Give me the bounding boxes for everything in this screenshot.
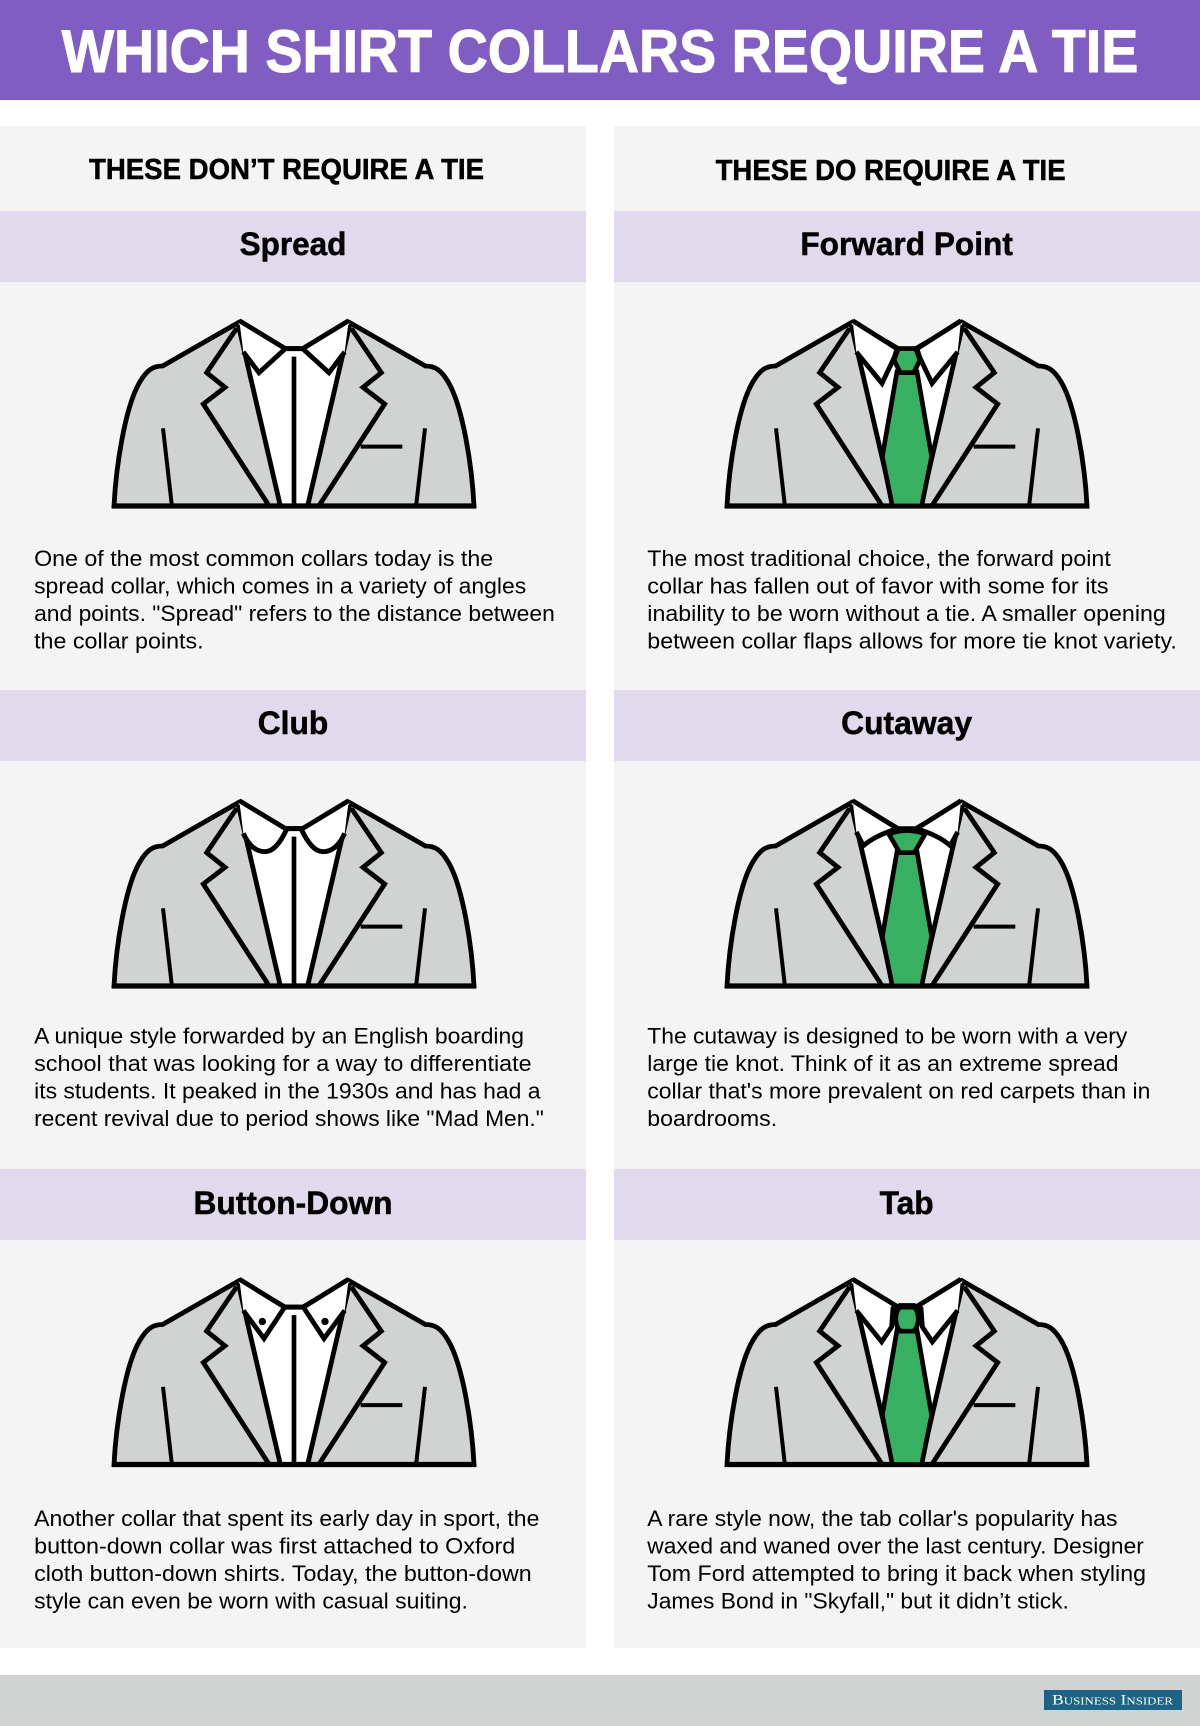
icon: tab collar jacket with tie [725,1279,1089,1466]
icon: spread collar jacket [112,321,476,507]
panel: Spread [0,211,586,653]
band: Spread: Spread [240,226,346,262]
panel: Tab [614,1169,1200,1613]
title banner [0,0,1200,100]
text: Tab description: A rare style now, the tab collar's popularity has [647,1506,1117,1531]
logo: Business Insider: Business Insider [1052,1692,1174,1708]
text: Tab description: James Bond in "Skyfall," but it didn’t stick. [647,1588,1069,1613]
text: Forward Point description: collar has fallen out of favor with some for its [647,573,1109,598]
text: Button-Down description: button-down collar was first attached to Oxford [34,1533,515,1558]
text: Button-Down description: style can even be worn with casual suiting. [34,1588,468,1613]
icon: cutaway collar jacket with tie [725,801,1089,987]
text: Forward Point description: The most traditional choice, the forward point [647,546,1111,571]
text: Spread description: and points. "Spread" refers to the distance between [34,601,555,626]
band: Button-Down: Button-Down [194,1185,392,1221]
band: Button-Down [0,1169,586,1240]
icon: club collar jacket [112,801,476,987]
panel: Club [0,690,586,1131]
text: Spread description [34,546,555,653]
band: Tab [614,1169,1200,1240]
text: Cutaway description: collar that's more prevalent on red carpets than in [647,1079,1150,1104]
text: Club description: its students. It peaked in the 1930s and has had a [34,1079,541,1104]
text: Tab description: waxed and waned over the last century. Designer [646,1533,1144,1558]
text: Tab description [646,1506,1146,1613]
text: Cutaway description [647,1024,1150,1131]
panel: right column background [614,126,1200,1648]
band: Forward Point: Forward Point [800,226,1013,262]
panel: Forward Point [614,211,1200,653]
text: Club description: A unique style forwarded by an English boarding [34,1024,524,1049]
panel: left column background [0,126,586,1648]
band: Cutaway: Cutaway [841,705,972,741]
text: Button-Down description: cloth button-down shirts. Today, the button-down [34,1561,532,1586]
band: Tab: Tab [880,1185,934,1221]
text: Tab description: Tom Ford attempted to bring it back when styling [647,1561,1146,1586]
band: Cutaway [614,690,1200,761]
text: Cutaway description: large tie knot. Think of it as an extreme spread [647,1051,1118,1076]
text: Club description: recent revival due to period shows like "Mad Men." [34,1106,544,1131]
panel: Button-Down [0,1169,586,1613]
text: Spread description: the collar points. [34,628,204,653]
heading: do require a tie: THESE DO REQUIRE A TIE [716,155,1066,187]
panel: Cutaway [614,690,1200,1131]
text: Cutaway description: The cutaway is designed to be worn with a very [647,1024,1127,1049]
text: Button-Down description [34,1506,539,1613]
icon: forward point collar jacket with tie [725,321,1089,507]
text: Spread description: One of the most common collars today is the [34,546,493,571]
footer bar [0,1675,1200,1726]
title banner: WHICH SHIRT COLLARS REQUIRE A TIE [62,18,1138,85]
band: Forward Point [614,211,1200,282]
band: Club [0,690,586,761]
icon: button-down collar jacket [112,1279,476,1466]
text: Button-Down description: Another collar that spent its early day in sport, the [34,1506,539,1531]
logo: Business Insider [1044,1690,1182,1710]
text: Club description [34,1024,544,1131]
text: Forward Point description [647,546,1177,653]
text: Spread description: spread collar, which comes in a variety of angles [34,573,526,598]
text: Club description: school that was looking for a way to differentiate [34,1051,532,1076]
band: Spread [0,211,586,282]
text: Cutaway description: boardrooms. [647,1106,777,1131]
heading: don't require a tie: THESE DON’T REQUIRE A TIE [89,154,484,186]
text: Forward Point description: inability to be worn without a tie. A smaller opening [647,601,1166,626]
band: Club: Club [258,705,328,741]
text: Forward Point description: between collar flaps allows for more tie knot variety. [647,628,1177,653]
